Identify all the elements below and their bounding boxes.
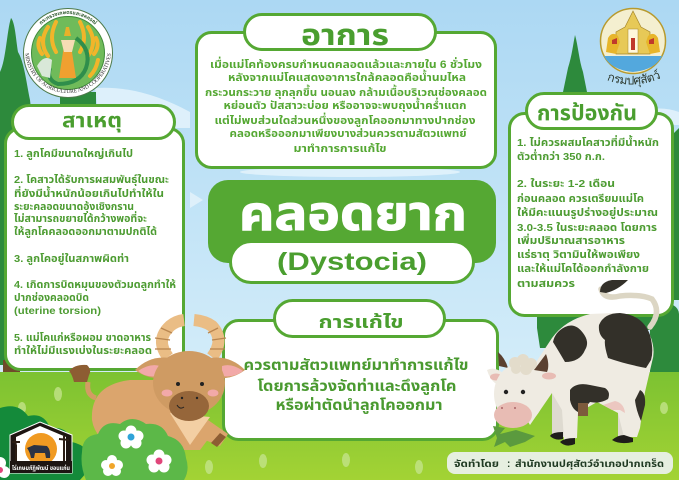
prevention list: ให้มีคะแนนรูปร่างอยู่ประมาณ <box>517 206 658 219</box>
prevention list: และให้แม่โคได้ออกกำลังกาย <box>517 262 649 275</box>
prevention list: ก่อนคลอด ควรเตรียมแม่โค <box>517 192 644 205</box>
symptoms text: หลังจากแม่โคแสดงอาการใกล้คลอดคือน้ำนมไหล <box>228 69 466 84</box>
flower: pink <box>146 450 172 472</box>
prevention list: ตามสมควร <box>517 278 576 290</box>
buffalo illustration <box>69 320 245 450</box>
prevention list: 3.0-3.5 ในระยะคลอด โดยการ <box>517 222 658 234</box>
grass highlights <box>18 387 668 474</box>
bush: bottom left dark <box>0 406 90 480</box>
symptoms text: คลอดหรือออกมาเพียงบางส่วนควรตามสัตวแพทย์ <box>230 127 467 140</box>
heading pill: prevention: การป้องกัน <box>537 102 637 125</box>
logo: Ministry of Agriculture and Cooperatives <box>23 8 113 98</box>
heading pill: symptoms <box>244 14 436 52</box>
causes list: 5. แม่โคแก่หรือผอม ขาดอาหาร <box>14 331 152 344</box>
logo: Ministry of Agriculture and Cooperatives: กระทรวงเกษตรและสหกรณ์ <box>40 11 98 25</box>
background trees <box>0 18 679 378</box>
panel: prevention <box>510 94 672 316</box>
subtitle pill <box>230 242 474 282</box>
causes list: ทำให้ไม่มีแรงเบ่งในระยะคลอด <box>14 344 152 357</box>
causes list: ระยะคลอดขนาดอุ้งเชิงกราน <box>14 200 134 213</box>
department name: กรมปศุสัตว์ <box>608 68 660 88</box>
cow illustration <box>487 280 657 447</box>
prevention list: 2. ในระยะ 1-2 เดือน <box>517 178 615 190</box>
causes list: 2. โคสาวได้รับการผสมพันธุ์ในขณะ <box>14 173 169 186</box>
logo: Department of Livestock Development <box>600 8 666 88</box>
causes list: (uterine torsion) <box>14 305 101 317</box>
treatment text <box>244 356 468 415</box>
symptoms text <box>205 56 487 155</box>
causes list: 1. ลูกโคมีขนาดใหญ่เกินไป <box>14 147 133 160</box>
logo: Ministry of Agriculture and Cooperatives: MINISTRY OF AGRICULTURE AND COOPERATIVES <box>25 53 111 93</box>
credit bar: สำนักงานปศุสัตว์อำเภอปากเกร็ด <box>515 458 664 470</box>
symptoms text: เมื่อแม่โคท้องครบกำหนดคลอดแล้วและภายใน 6 ชั่วโมง <box>210 56 482 71</box>
panel: treatment <box>224 300 498 440</box>
treatment text: หรือผ่าตัดนำลูกโคออกมา <box>276 396 442 415</box>
credit bar <box>447 452 673 474</box>
causes list: ที่ยังมีน้ำหนักน้อยเกินไปทำให้ใน <box>14 186 164 200</box>
background clouds <box>95 88 679 208</box>
heading pill: causes: สาเหตุ <box>62 110 122 132</box>
symptoms text: กระวนกระวาย ลุกลุกขึ้น นอนลง กล้ามเนื้อบริเวณช่องคลอด <box>205 84 487 99</box>
symptoms text: หย่อนตัว ปัสสาวะบ่อย หรืออาจจะพบถุงน้ำคร่ำแตก <box>224 97 467 112</box>
causes list: ไม่สามารถขยายได้กว้างพอที่จะ <box>14 211 147 225</box>
credit bar: : <box>507 459 510 470</box>
causes list: 4. เกิดการบิดหมุนของตัวมดลูกทำให้ <box>14 278 176 291</box>
main title: คลอดยาก <box>239 188 467 241</box>
causes list: 3. ลูกโคอยู่ในสภาพผิดท่า <box>14 252 129 265</box>
flower: edge <box>0 457 10 478</box>
panel: symptoms <box>196 14 496 168</box>
left tree trunk <box>3 360 20 382</box>
symptoms text: แต่ไม่พบส่วนใดส่วนหนึ่งของลูกโคออกมาทางปากช่อง <box>214 112 476 127</box>
title block <box>208 180 496 282</box>
subtitle pill: (Dystocia) <box>277 248 427 276</box>
symptoms text: มาทำการการแก้ไข <box>294 142 386 155</box>
treatment text: ควรตามสัตวแพทย์มาทำการแก้ไข <box>244 356 468 374</box>
heading pill: causes <box>12 106 174 138</box>
farm logo: ไร่เกษมภัฏิพัฒน์ ขอนแก่น <box>12 464 70 472</box>
prevention list: แร่ธาตุ วิตามินให้พอเพียง <box>517 248 640 261</box>
grass field <box>0 372 679 480</box>
flower: orange <box>101 455 123 476</box>
heading pill: prevention <box>526 94 656 128</box>
flower: blue <box>118 426 144 448</box>
heading pill: treatment: การแก้ไข <box>318 312 404 332</box>
flower bush <box>82 419 188 480</box>
prevention list: ตัวต่ำกว่า 350 ก.ก. <box>517 149 605 163</box>
causes list: ปากช่องคลอดบิด <box>14 291 89 304</box>
causes list: ให้ลูกโคคลอดออกมาตามปกติได้ <box>14 225 157 238</box>
farm logo <box>10 422 72 473</box>
treatment text: โดยการล้วงจัดท่าและดึงลูกโค <box>258 377 456 396</box>
heading pill: treatment <box>274 300 444 336</box>
causes list <box>14 147 176 357</box>
prevention list: เพิ่มปริมาณสารอาหาร <box>517 234 626 247</box>
heading pill: symptoms: อาการ <box>301 20 389 52</box>
prevention list: 1. ไม่ควรผสมโคสาวที่มีน้ำหนัก <box>517 135 659 149</box>
panel: causes <box>6 106 184 370</box>
credit bar: จัดทำโดย <box>454 458 499 470</box>
prevention list <box>517 135 659 290</box>
